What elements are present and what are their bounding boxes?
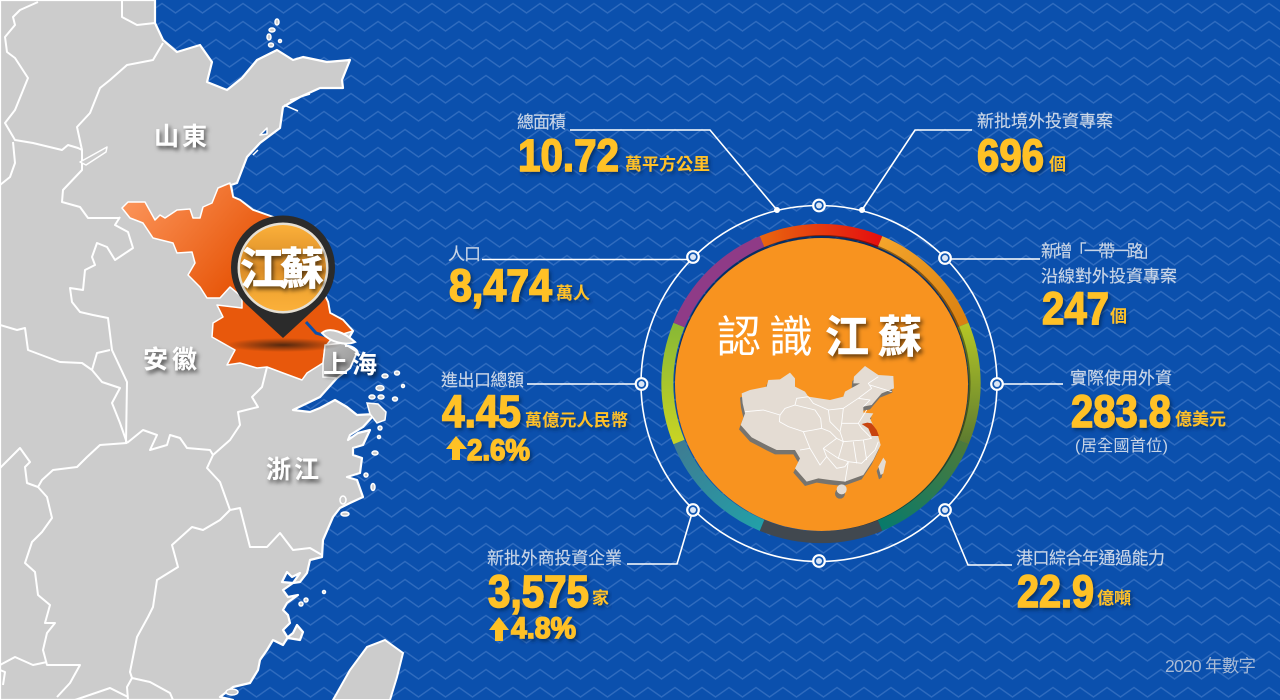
- pin label: 江蘇: [240, 245, 324, 294]
- stat: total area: [517, 113, 710, 181]
- Yangtze river and Chongming island: [306, 322, 358, 354]
- Jiangsu province: [122, 183, 353, 380]
- pin disc: [238, 222, 328, 314]
- stat: population: 8,474: [449, 260, 552, 311]
- stat: utilised foreign capital: (居全國首位): [1075, 437, 1168, 455]
- map province lines: [745, 377, 892, 482]
- pin shadow: [225, 338, 341, 352]
- offshore islands: [226, 19, 404, 695]
- stat: Belt and Road projects: 沿線對外投資專案: [1041, 267, 1177, 286]
- Shanghai: [323, 343, 357, 378]
- stat: total area: 10.72: [518, 130, 619, 181]
- map land: [741, 366, 894, 494]
- centre title: 江蘇: [825, 313, 922, 362]
- stat: total trade: [441, 371, 628, 467]
- stat: Belt and Road projects: [1041, 242, 1177, 334]
- stat: new foreign firms: 3,575: [488, 566, 589, 617]
- stat: approved outbound projects: 個: [1049, 155, 1066, 174]
- map pin: Jiangsu: [225, 215, 341, 352]
- stat: total trade: 萬億元人民幣: [525, 410, 628, 430]
- province borders: [0, 0, 322, 700]
- stat: approved outbound projects: 696: [977, 130, 1044, 181]
- stat: port capacity: 億噸: [1097, 588, 1131, 608]
- land mass: [0, 0, 375, 700]
- China mini map: [739, 366, 894, 499]
- central orange disc: [674, 235, 970, 531]
- data year note: 2020 年數字: [1165, 656, 1256, 676]
- stat: port capacity: 22.9: [1017, 566, 1094, 617]
- stat: port capacity: 港口綜合年通過能力: [1016, 549, 1165, 568]
- ring nodes: [636, 200, 1003, 567]
- arrow up: [446, 436, 467, 460]
- stat: new foreign firms: [487, 549, 622, 645]
- stat: new foreign firms: 家: [592, 588, 609, 608]
- stat: utilised foreign capital: 283.8: [1071, 386, 1171, 437]
- stat: population: 萬人: [556, 284, 590, 303]
- Taiwan: [333, 640, 403, 700]
- label: Shanghai: 上海: [323, 351, 377, 379]
- stat: Belt and Road projects: 新增「一帶一路」: [1041, 242, 1158, 261]
- connector lines and outer ring: [482, 130, 1063, 565]
- label: Zhejiang: 浙江: [266, 456, 319, 484]
- stat: utilised foreign capital: [1070, 368, 1226, 455]
- stat: population: [448, 245, 590, 311]
- stat: utilised foreign capital: 實際使用外資: [1070, 368, 1172, 388]
- stat: Belt and Road projects: 個: [1110, 307, 1127, 326]
- arrow up: [489, 617, 509, 641]
- stat: Belt and Road projects: 247: [1042, 283, 1109, 334]
- stat: new foreign firms: 新批外商投資企業: [487, 549, 622, 568]
- label: Shandong: 山東: [154, 123, 207, 151]
- stat: utilised foreign capital: 億美元: [1175, 409, 1226, 429]
- stat: total trade: 4.45: [442, 386, 521, 437]
- centre title: [717, 313, 922, 362]
- map: eastern China provinces: [0, 0, 404, 700]
- stat: total trade: 進出口總額: [441, 371, 524, 390]
- centre title: 認識: [717, 313, 813, 362]
- lake and coastal inlets: [80, 94, 310, 165]
- Jiangsu highlight: [862, 423, 879, 436]
- map shadow: [739, 370, 892, 499]
- stat: port capacity: [1016, 549, 1165, 617]
- pin body: [231, 215, 335, 338]
- stat: approved outbound projects: [977, 112, 1113, 181]
- stat: total area: 總面積: [517, 113, 566, 132]
- stat: total trade: 2.6%: [467, 434, 530, 467]
- label: Anhui: 安徽: [143, 346, 197, 374]
- coloured ring segments: [667, 230, 975, 537]
- stat: population: 人口: [448, 245, 481, 264]
- stat: new foreign firms: 4.8%: [511, 612, 576, 645]
- stat: approved outbound projects: 新批境外投資專案: [977, 112, 1113, 131]
- stat: total area: 萬平方公里: [625, 154, 710, 174]
